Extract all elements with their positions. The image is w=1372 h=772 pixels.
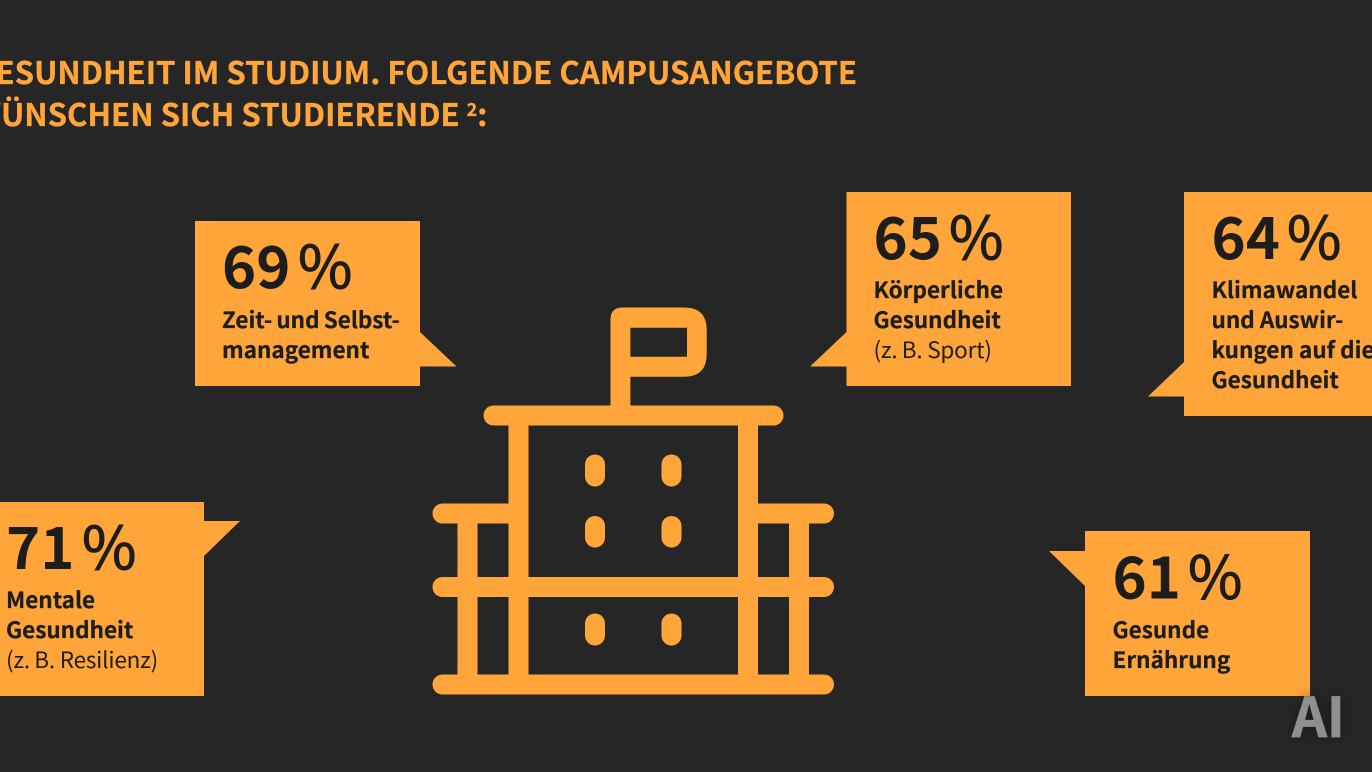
callout: 71 % Mentale Gesundheit: (z. B. Resilienz): [6, 643, 158, 675]
title: 2: [467, 96, 477, 122]
callout: 71 % Mentale Gesundheit: 71: [6, 502, 74, 586]
callout: 65 % Körperliche Gesundheit: (z. B. Sport): [874, 333, 992, 365]
callout: 69 % Zeit- und Selbstmanagement: Zeit- und Selbst-: [222, 303, 400, 335]
callout: 69 % Zeit- und Selbstmanagement: 69: [222, 221, 290, 305]
callout: 64 % Klimawandel: 64: [1212, 192, 1280, 276]
watermark: AI: AI: [1291, 674, 1345, 753]
icon: campus building with flag: [442, 308, 824, 684]
callout: 69 % Zeit- und Selbstmanagement: management: [222, 333, 370, 365]
callout: 64 % Klimawandel: Gesundheit: [1212, 363, 1339, 395]
callout: 71 % Mentale Gesundheit: %: [82, 501, 136, 586]
callout: 61 % Gesunde Ernährung: Gesunde: [1112, 613, 1209, 645]
callout: 64 % Klimawandel: kungen auf die: [1212, 333, 1372, 365]
callout: 61 % Gesunde Ernährung: Ernährung: [1112, 643, 1231, 675]
callout: 64 % Klimawandel: und Auswir-: [1212, 303, 1343, 335]
title: [0, 48, 857, 135]
callout: 69 % Zeit- und Selbstmanagement: %: [298, 220, 352, 305]
callout: 69 % Zeit- und Selbstmanagement: [195, 220, 456, 386]
callout: 61 % Gesunde Ernährung: [1049, 530, 1310, 696]
callout: 65 % Körperliche Gesundheit: %: [949, 191, 1003, 276]
callout: 71 % Mentale Gesundheit: Gesundheit: [6, 613, 134, 645]
callout: 64 % Klimawandel: Klimawandel: [1212, 273, 1357, 305]
callout: 71 % Mentale Gesundheit: Mentale: [6, 583, 95, 615]
callout: 65 % Körperliche Gesundheit: [810, 191, 1071, 386]
callout: 65 % Körperliche Gesundheit: Körperliche: [874, 273, 1003, 305]
callout: 65 % Körperliche Gesundheit: 65: [874, 192, 942, 276]
callout: 64 % Klimawandel: %: [1287, 191, 1341, 276]
callout: 71 % Mentale Gesundheit: [0, 501, 240, 696]
callout: 61 % Gesunde Ernährung: 61: [1112, 532, 1181, 616]
title: :: [477, 90, 487, 135]
callout: 65 % Körperliche Gesundheit: Gesundheit: [874, 303, 1001, 335]
callout: 64 % Klimawandel: [1148, 191, 1372, 416]
callout: 61 % Gesunde Ernährung: %: [1188, 530, 1242, 616]
